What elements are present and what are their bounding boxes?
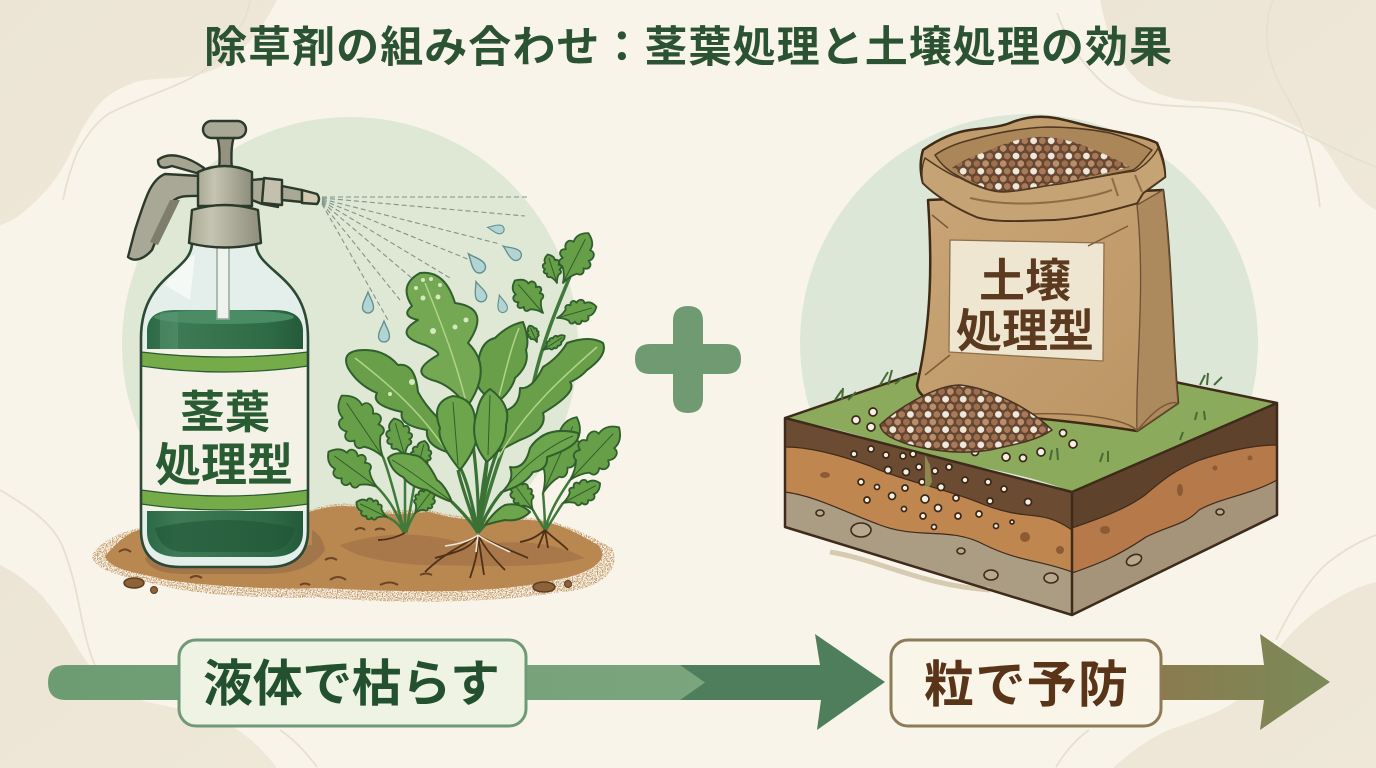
soil ground under plants <box>92 504 614 602</box>
roots <box>378 530 568 578</box>
left small weed <box>318 384 441 533</box>
white granules in soil <box>851 408 1077 530</box>
bottle label text: 茎葉 <box>180 387 270 438</box>
grass tufts <box>835 370 1222 462</box>
bottle liquid <box>147 243 303 557</box>
pump head <box>128 121 319 260</box>
soil speckles <box>820 456 1252 554</box>
right small weed <box>503 410 633 530</box>
bag opening <box>935 127 1152 191</box>
spray mist <box>322 197 530 320</box>
bag label text: 土壌 <box>979 255 1071 307</box>
left face layers <box>785 418 1072 615</box>
arrow 1: liquid to withering <box>48 634 885 730</box>
bag label <box>949 240 1104 361</box>
bag rim back <box>921 117 1165 221</box>
right face layers <box>1072 403 1277 615</box>
block outline <box>785 373 1277 615</box>
bag label text <box>956 255 1094 357</box>
icon: plus sign <box>635 306 741 413</box>
icon: soil block cross section <box>785 350 1277 615</box>
tall stalk <box>478 226 603 530</box>
granule pile <box>880 385 1052 452</box>
bag label text: 処理型 <box>956 305 1094 357</box>
bag rim fold <box>922 148 1165 221</box>
bag folds <box>925 215 1178 431</box>
main weed leaves <box>346 273 604 452</box>
main weed stems and midribs <box>355 283 597 533</box>
bottle glass <box>141 243 308 567</box>
panel: soil treatment background circle <box>800 114 1258 572</box>
bottle label text: 処理型 <box>155 439 293 491</box>
arrow 2: granule prevention <box>1150 634 1330 730</box>
panel: foliar treatment background circle <box>122 117 578 573</box>
bottle label text <box>155 387 293 491</box>
callout: granules prevent <box>891 640 1161 726</box>
callout: liquid withers <box>179 640 526 726</box>
bag side panel <box>1137 190 1178 431</box>
bottle label <box>141 349 308 511</box>
title: 除草剤の組み合わせ：茎葉処理と土壌処理の効果 <box>204 24 1172 72</box>
icon: burlap bag <box>917 117 1178 431</box>
leaf wet spots <box>388 277 468 396</box>
callout: liquid withers: 液体で枯らす <box>203 656 500 712</box>
icon: weed plants <box>318 226 633 578</box>
icon: spray bottle <box>128 121 319 567</box>
granules in bag <box>952 137 1130 191</box>
bag body <box>917 190 1178 431</box>
pebbles <box>816 509 1224 583</box>
callout: granules prevent: 粒で予防 <box>924 657 1128 713</box>
water droplets <box>362 223 524 342</box>
grass top <box>785 350 1277 492</box>
